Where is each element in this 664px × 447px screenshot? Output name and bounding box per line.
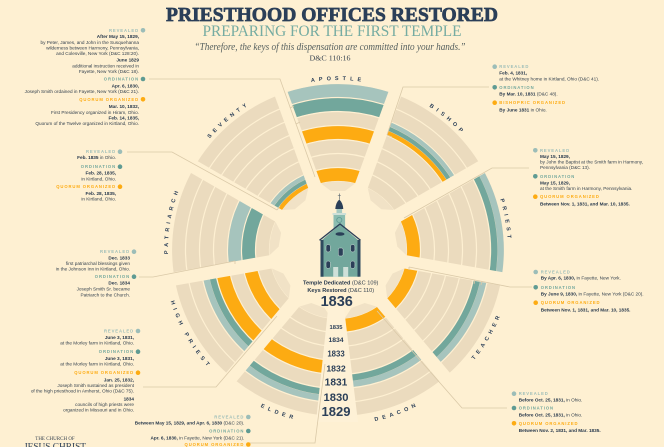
sector: Deacon <box>113 25 563 447</box>
callout: Apostle: Quorum of the Twelve organized in Kirtland, Ohio. <box>35 121 139 126</box>
callout: Patriarch: Dec. 1833 <box>108 255 130 260</box>
title: PRIESTHOOD OFFICES RESTORED <box>166 4 498 26</box>
icon: Kirtland Temple <box>320 194 360 277</box>
callout: Elder: QUORUM ORGANIZED <box>185 442 244 447</box>
label: Apostle: APOSTLE <box>311 76 362 82</box>
callout: High Priest: councils of high priests were <box>75 402 134 407</box>
sector labels <box>164 76 512 421</box>
callout: Priest: at the Smith farm in Harmony, Pennsylvania. <box>540 186 632 191</box>
sector: Elder <box>178 90 498 410</box>
callout: Apostle: After May 15, 1829, <box>97 34 139 39</box>
callout: Priest <box>533 148 643 206</box>
callout: Patriarch: Joseph Smith Sr. became <box>77 287 130 292</box>
callout: Elder <box>135 414 251 447</box>
callout: Patriarch: REVEALED <box>100 249 130 254</box>
callout: Bishop <box>492 64 599 112</box>
callout: High Priest: at the Morley farm in Kirtland, Ohio. <box>60 361 134 366</box>
callout: High Priest <box>31 328 140 413</box>
label: Elder: ELDER <box>260 404 294 419</box>
callout: Deacon <box>512 391 601 433</box>
callout: Patriarch: ORDINATION <box>95 274 130 279</box>
callout: Apostle: Feb. 14, 1835, <box>108 116 139 120</box>
callout: High Priest: 1834 <box>124 396 134 401</box>
callout: Elder: ORDINATION <box>209 428 244 434</box>
callout: Apostle: June 1829 <box>116 58 139 62</box>
callout: Bishop: at the Whitney home in Kirtland, Ohio (D&C 41). <box>499 76 599 81</box>
callout: Bishop: By Mar. 10, 1831 (D&C 48). <box>499 92 558 97</box>
label: Bishop: BISHOP <box>430 104 463 131</box>
sector: Priest <box>116 28 560 447</box>
callout: Apostle: First Presidency organized in Hiram, Ohio. <box>51 110 139 115</box>
callout: Seventy: in Kirtland, Ohio. <box>81 176 116 181</box>
callout: Seventy: in Kirtland, Ohio. <box>81 197 116 202</box>
year labels: 1829 <box>322 404 350 419</box>
sector: High Priest <box>113 25 563 447</box>
callout: Deacon: Between Nov. 2, 1831, and Mar. 1835. <box>519 428 601 433</box>
callout: Teacher: REVEALED <box>541 270 571 274</box>
callout: Seventy: QUORUM ORGANIZED <box>56 184 116 189</box>
sector: Bishop <box>134 46 542 447</box>
callout: Teacher <box>533 270 644 312</box>
year labels <box>322 325 350 419</box>
sector: Patriarch <box>153 65 523 435</box>
callout: Seventy: Feb. 28, 1835, <box>86 171 116 176</box>
connector lines <box>127 79 532 443</box>
callout: Apostle: Mar. 10, 1832, <box>109 104 139 109</box>
callout: Elder: Apr. 6, 1830, in Fayette, New York (D&C 21). <box>150 435 244 440</box>
label: Patriarch: PATRIARCH <box>164 190 178 254</box>
year labels: 1834 <box>328 337 344 344</box>
callout: Apostle <box>25 28 145 126</box>
callout: High Priest: June 3, 1831, <box>105 356 134 361</box>
temple caption: Keys Restored (D&C 110) <box>307 288 374 294</box>
logo: church name: THE CHURCH OF <box>35 437 75 442</box>
callout: Apostle: by Peter, James, and John in the Susquehanna <box>40 40 139 45</box>
callout: Deacon: REVEALED <box>519 391 549 396</box>
year column <box>316 300 358 422</box>
callout: High Priest: June 3, 1831, <box>105 335 134 340</box>
label: Deacon: DEACON <box>374 404 416 421</box>
year labels: 1835 <box>330 325 343 331</box>
callout: Patriarch: in the Johnson Inn in Kirtland, Ohio. <box>56 267 130 272</box>
sector: Apostle <box>134 46 542 447</box>
callout: Elder: Between May 15, 1829, and Apr. 6, 1830 (D&C 20). <box>135 421 244 426</box>
callout: Deacon: QUORUM ORGANIZED <box>519 421 578 426</box>
callout: Apostle: QUORUM ORGANIZED <box>79 97 139 102</box>
radial timeline chart <box>113 25 563 447</box>
callout: Priest: QUORUM ORGANIZED <box>540 194 600 199</box>
callout: Elder: REVEALED <box>214 414 244 420</box>
temple caption: Temple Dedicated (D&C 109) <box>303 281 379 287</box>
callout: Patriarch: Dec. 1834 <box>108 281 130 286</box>
callout: Apostle: Apr. 6, 1830, <box>112 84 139 88</box>
callout: Priest: REVEALED <box>540 148 570 153</box>
callout: Priest: ORDINATION <box>540 174 575 179</box>
callout: High Priest: at the Morley farm in Kirtland, Ohio. <box>60 340 134 345</box>
callout: Priest: May 15, 1829, <box>540 154 570 159</box>
callout: Bishop: By June 1831 in Ohio. <box>499 107 547 112</box>
callout: Bishop: Feb. 4, 1831, <box>499 70 527 75</box>
label: Seventy: SEVENTY <box>208 103 246 138</box>
callout: Bishop: REVEALED <box>499 64 529 69</box>
callout: Deacon: Before Oct. 25, 1831, in Ohio. <box>519 397 582 402</box>
label: Priest: PRIEST <box>500 198 512 238</box>
callout: High Priest: organized in Missouri and in Ohio. <box>63 408 134 413</box>
callout: Teacher: By June 9, 1830, in Fayette, New York (D&C 20). <box>541 292 644 297</box>
callout: Seventy <box>56 149 122 202</box>
callout: Patriarch: first patriarchal blessings given <box>66 261 130 266</box>
temple caption <box>303 281 379 294</box>
callout: Seventy: Feb. 1835 in Ohio. <box>77 155 116 160</box>
year 1836: 1836 <box>321 294 353 310</box>
callout: Deacon: ORDINATION <box>519 406 554 410</box>
callout: Teacher: By Apr. 6, 1830, in Fayette, New York. <box>541 276 621 281</box>
label: Teacher: TEACHER <box>471 316 500 359</box>
scripture reference: D&C 110:16 <box>310 54 351 62</box>
callout: Priest: Pennsylvania (D&C 13). <box>540 165 590 170</box>
year labels: 1833 <box>327 350 345 358</box>
callout: Priest: by John the Baptist at the Smith farm in Harmony, <box>540 160 643 165</box>
year labels: 1830 <box>324 392 348 404</box>
callout: Apostle: Fayette, New York (D&C 18). <box>79 69 139 74</box>
callout: Seventy: ORDINATION <box>81 164 116 169</box>
label: High Priest: HIGH PRIEST <box>170 300 210 366</box>
callout: Bishop: BISHOPRIC ORGANIZED <box>499 100 566 105</box>
quote: “Therefore, the keys of this dispensation are committed into your hands.” <box>194 42 466 53</box>
sector: Teacher <box>153 65 523 435</box>
callout: Apostle: Joseph Smith ordained in Fayette, New York (D&C 21). <box>25 89 139 94</box>
callout: Deacon: Before Oct. 25, 1831, in Ohio. <box>519 412 582 417</box>
logo: church name <box>24 437 87 447</box>
callout: Priest: May 15, 1829, <box>540 180 570 185</box>
year labels: 1832 <box>326 363 346 373</box>
callout: Apostle: REVEALED <box>109 28 139 33</box>
callout: High Priest: of the high priesthood in Amherst, Ohio (D&C 75). <box>31 389 134 394</box>
callout: High Priest: Joseph Smith sustained as president <box>57 383 135 388</box>
callout: Apostle: wilderness between Harmony, Pennsylvania, <box>46 46 139 50</box>
callout: Seventy: REVEALED <box>86 149 116 154</box>
callout: Patriarch: Patriarch to the Church. <box>80 292 130 297</box>
callout: High Priest: REVEALED <box>104 328 134 334</box>
year labels: 1831 <box>325 378 348 389</box>
callout: Teacher: ORDINATION <box>541 285 576 290</box>
subtitle: PREPARING FOR THE FIRST TEMPLE <box>202 23 462 40</box>
callout: Apostle: additional instruction received in <box>72 64 139 68</box>
callout: Teacher: QUORUM ORGANIZED <box>541 300 600 305</box>
callout: Seventy: Feb. 28, 1835, <box>86 191 116 196</box>
callout: Bishop: ORDINATION <box>499 85 535 90</box>
callout: High Priest: QUORUM ORGANIZED <box>74 370 134 375</box>
callout: Teacher: Between Nov. 1, 1831, and Mar. 10, 1835. <box>541 307 631 312</box>
sector: Seventy <box>120 32 556 447</box>
callout: Patriarch <box>56 249 136 297</box>
callout: High Priest: ORDINATION <box>99 349 134 354</box>
callout: Apostle: and Colesville, New York (D&C 128:20). <box>56 51 139 56</box>
callout: Priest: Between Nov. 1, 1831, and Mar. 10, 1835. <box>540 201 630 206</box>
callout: High Priest: Jan. 25, 1832, <box>104 377 134 382</box>
callout: Apostle: ORDINATION <box>104 76 139 82</box>
